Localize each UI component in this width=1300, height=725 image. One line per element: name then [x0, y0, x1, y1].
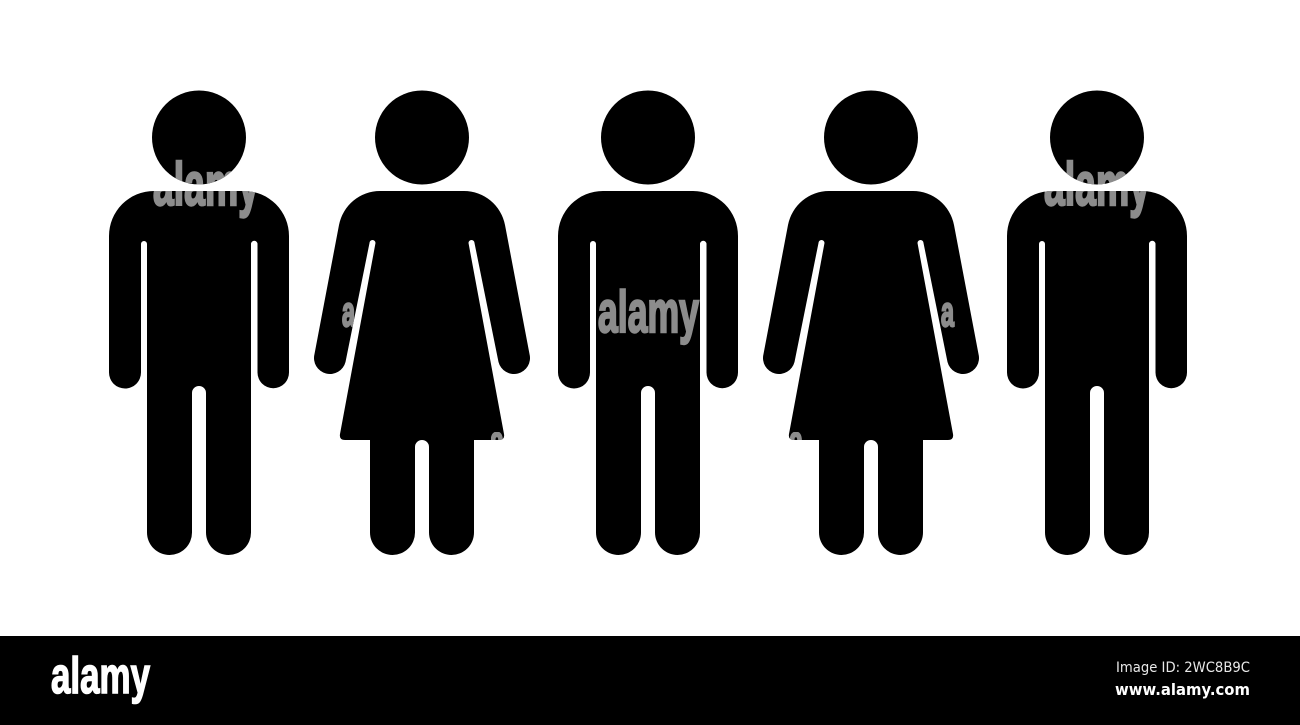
watermark: fragment on second figure skirt: a — [490, 417, 504, 464]
watermark: fragment on fourth figure skirt: a — [789, 417, 803, 464]
watermark: left figure: alamy — [153, 151, 259, 218]
watermark: right figure: alamy — [1044, 151, 1150, 218]
icon: female figure 1 — [314, 90, 530, 555]
icon: female figure 2 — [763, 90, 979, 555]
watermark: centre figure: alamy — [598, 280, 699, 345]
footer bar — [0, 636, 1300, 725]
icon: male figure 1 — [109, 90, 289, 555]
watermark: letter on fourth figure arm: a — [941, 288, 954, 335]
icon: male figure 3 — [1007, 90, 1187, 555]
watermark: letter on second figure arm: a — [342, 288, 355, 335]
image id: Image ID: 2WC8B9C — [1116, 660, 1250, 676]
footer logo: alamy — [51, 647, 150, 704]
icon: male figure 2 — [558, 90, 738, 555]
website url: www.alamy.com — [1115, 680, 1250, 699]
